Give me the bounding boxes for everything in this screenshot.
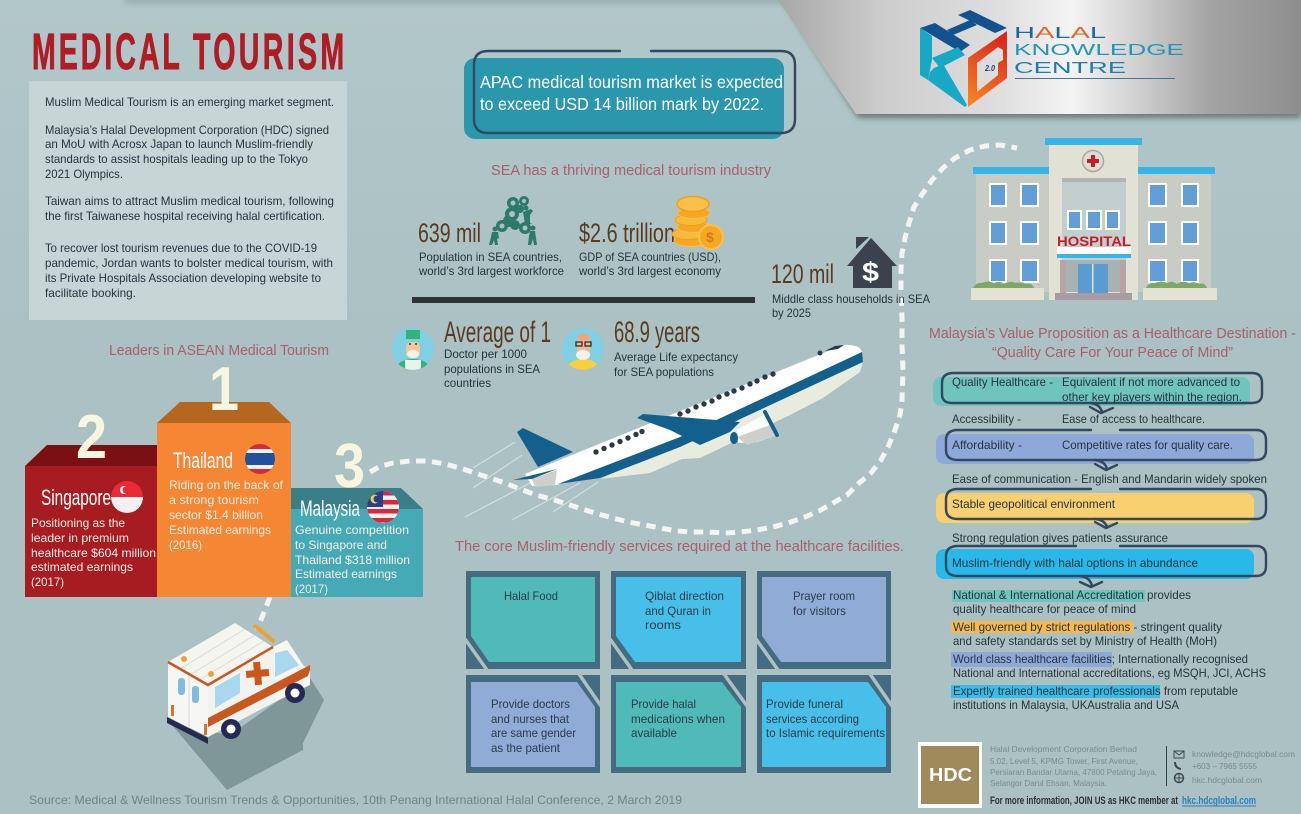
card: halal food (465, 571, 600, 670)
podium: Thailand (157, 355, 291, 597)
list: highlighted facts (951, 588, 1266, 712)
stat: average of 1 doctor: populations in SEA (444, 362, 540, 376)
item: quality healthcare: Quality Healthcare - (952, 375, 1053, 389)
heading: core services: The core Muslim-friendly services required at the healthcare facilities. (455, 539, 904, 555)
card: qiblat: and Quran in (645, 604, 711, 618)
fact: professionals: Expertly trained healthcare professionals from reputable (953, 684, 1238, 698)
footer: address: Halal Development Corporation Berhad (990, 744, 1137, 754)
podium: Malaysia: (2017) (295, 582, 328, 596)
fact: facilities: World class healthcare facilities; Internationally recognised (953, 652, 1248, 666)
card: qiblat: rooms (645, 618, 681, 632)
panel: introduction: Muslim Medical Tourism is an emerging market segment. (45, 95, 334, 109)
item: strong regulation: Strong regulation gives patients assurance (952, 531, 1168, 545)
fact: professionals: institutions in Malaysia, UKAustralia and USA (953, 698, 1179, 712)
fact: facilities: National and International accreditations, eg MSQH, JCI, ACHS (953, 666, 1266, 680)
title: MEDICAL (32, 23, 180, 80)
item: geopolitical: Stable geopolitical environment (952, 497, 1116, 511)
fact: accreditation: quality healthcare for peace of mind (953, 602, 1136, 616)
callout: APAC market (464, 51, 795, 139)
item: quality healthcare (933, 373, 1262, 413)
fact: professionals (951, 684, 1238, 712)
podium: Malaysia: Estimated earnings (295, 567, 397, 581)
stat: life expectancy: 68.9 years (614, 316, 700, 349)
card: halal food: Halal Food (504, 589, 558, 603)
card: doctors and nurses: are same gender (491, 726, 576, 740)
heading: value proposition (929, 326, 1296, 361)
item: affordability: Competitive rates for quality care. (1062, 438, 1233, 452)
podium: Thailand: (2016) (169, 538, 202, 552)
logo wordmark: CENTRE (1014, 60, 1126, 77)
item: muslim-friendly (936, 546, 1266, 587)
divider bar (412, 297, 755, 303)
title (32, 23, 344, 80)
card: halal medications: Provide halal (631, 697, 696, 711)
fact: regulations: Well governed by strict regulations - stringent quality (953, 620, 1222, 634)
podium: Malaysia: 3 (334, 432, 365, 501)
card: funeral services (757, 674, 892, 773)
footer: address (990, 744, 1157, 788)
item: accessibility: Ease of access to healthcare. (1062, 412, 1205, 426)
footer: contacts (1166, 746, 1295, 786)
footer: membership call to action: For more information, JOIN US as HKC member at (990, 795, 1178, 807)
item: affordability: Affordability - (952, 438, 1022, 452)
services grid (465, 571, 892, 773)
podium: Malaysia: Malaysia (300, 496, 361, 521)
panel: introduction: Malaysia’s Halal Development Corporation (HDC) signed (45, 123, 329, 137)
podium: Thailand: a strong tourism (169, 493, 259, 507)
podium: Thailand: Estimated earnings (169, 523, 271, 537)
item: affordability (936, 430, 1266, 470)
icon: elderly man (562, 328, 604, 370)
podium: Thailand: Riding on the back of (169, 478, 284, 492)
illustration: ambulance (167, 623, 324, 790)
logo wordmark (1014, 25, 1184, 79)
stat: $2.6 trillion: world’s 3rd largest economy (578, 264, 721, 278)
podium: Malaysia (291, 432, 423, 597)
footer: address: 5.02, Level 5, KPMG Tower, First Avenue, (990, 756, 1138, 766)
panel: introduction: an MoU with Acrosx Japan to launch Muslim-friendly (45, 137, 313, 151)
illustration: airplane (465, 345, 863, 520)
footer: HDC logo: HDC (929, 765, 972, 785)
card: doctors and nurses (466, 674, 601, 773)
list: value proposition items (933, 373, 1267, 587)
flag: Thailand (245, 444, 275, 474)
stat: life expectancy: Average Life expectancy (614, 350, 738, 364)
podium: Thailand: sector $1.4 billion (169, 508, 263, 522)
stat: average of 1 doctor (444, 316, 551, 390)
icon: doctor (392, 328, 434, 370)
card: halal medications (611, 674, 747, 773)
item: ease of communication: Ease of communication - English and Mandarin widely spoken (952, 472, 1267, 486)
heading: leaders: Leaders in ASEAN Medical Tourism (109, 343, 329, 359)
footer: HDC logo (918, 742, 982, 808)
logo wordmark: KNOWLEDGE (1014, 42, 1184, 59)
podium: Singapore: healthcare $604 million (31, 546, 156, 560)
source note: Source: Medical & Wellness Tourism Trends & Opportunities, 10th Penang International Halal Conference, 2 March 2019 (29, 793, 682, 807)
footer: contacts: knowledge@hdcglobal.com (1192, 749, 1295, 759)
logo cube: 2.0 (984, 64, 995, 73)
stat: 120 mil (771, 259, 930, 320)
card: funeral services: Provide funeral (766, 697, 843, 711)
icon: house with dollar: $ (862, 257, 879, 287)
logo cube (920, 10, 1007, 107)
stat: 639 mil: Population in SEA countries, (419, 250, 562, 264)
stat: average of 1 doctor: countries (444, 376, 491, 390)
stat: $2.6 trillion (578, 218, 721, 278)
stat: average of 1 doctor: Doctor per 1000 (444, 347, 527, 361)
panel: introduction: Taiwan aims to attract Muslim medical tourism, following (45, 194, 334, 208)
podium: Singapore: Positioning as the (31, 516, 125, 530)
panel: introduction: 2021 Olympics. (45, 167, 123, 181)
stat: average of 1 doctor: Average of 1 (444, 316, 551, 349)
footer: address: Selangor Darul Ehsan, Malaysia. (990, 778, 1107, 788)
card: halal medications: available (631, 726, 677, 740)
footer: membership call to action: hkc.hdcglobal.com (1182, 795, 1256, 807)
stat: life expectancy: for SEA populations (614, 365, 714, 379)
callout: APAC market: APAC medical tourism market is expected (480, 72, 783, 92)
route: dashed flight path (370, 145, 1017, 533)
card: funeral services: to Islamic requirements (766, 726, 885, 740)
icon: coins (672, 196, 723, 249)
fact: accreditation: National & International Accreditation provides (953, 588, 1191, 602)
title: TOURISM (193, 23, 344, 80)
panel: introduction: To recover lost tourism revenues due to the COVID-19 (45, 241, 317, 255)
panel: introduction: the first Taiwanese hospital receiving halal certification. (45, 209, 325, 223)
panel: introduction: its Private Hospitals Association developing website to (45, 271, 321, 285)
heading: value proposition: “Quality Care For Your Peace of Mind” (992, 345, 1233, 361)
footer: contacts: +603 – 7965 5555 (1192, 761, 1257, 771)
panel: introduction: facilitate booking. (45, 286, 136, 300)
panel: introduction (29, 81, 347, 320)
card: doctors and nurses: as the patient (491, 741, 561, 755)
card: halal medications: medications when (631, 712, 725, 726)
item: accessibility: Accessibility - (952, 412, 1021, 426)
stat: 639 mil (418, 218, 564, 278)
item: accessibility (952, 412, 1205, 426)
item: geopolitical (936, 489, 1266, 528)
stat: 120 mil: by 2025 (772, 306, 811, 320)
podium: Singapore: 2 (76, 403, 107, 472)
illustration: hospital: HOSPITAL (1057, 233, 1131, 249)
route: dashes to ambulance (257, 597, 270, 630)
flag: Singapore (111, 481, 143, 513)
flag: Malaysia (367, 491, 399, 523)
stat: $2.6 trillion: $2.6 trillion (579, 218, 675, 248)
podium: Thailand: Thailand (173, 448, 233, 473)
header banner with logo (778, 0, 1301, 118)
podium: Malaysia: Thailand $318 million (295, 553, 410, 567)
logo wordmark: H A L A L (1014, 25, 1107, 42)
fact: facilities (951, 652, 1266, 680)
card: qiblat (610, 571, 746, 670)
callout: APAC market: to exceed USD 14 billion mark by 2022. (480, 94, 764, 114)
card: doctors and nurses: and nurses that (491, 712, 570, 726)
podium: Malaysia: to Singapore and (295, 538, 387, 552)
stat: $2.6 trillion: GDP of SEA countries (USD), (579, 250, 721, 264)
card: qiblat: Qiblat direction (645, 589, 724, 603)
podium: Singapore (25, 403, 157, 597)
panel: introduction: pandemic, Jordan wants to bolster medical tourism, with (45, 256, 333, 270)
stat: 120 mil: 120 mil (771, 259, 834, 289)
stat: 120 mil: Middle class households in SEA (772, 292, 930, 306)
footer: address: Persiaran Bandar Utama, 47800 Petaling Jaya, (990, 767, 1157, 777)
card: prayer room: Prayer room (793, 589, 855, 603)
illustration: hospital (971, 138, 1217, 300)
icon: people and gears (489, 196, 537, 245)
panel: introduction: standards to assist hospitals leading up to the Tokyo (45, 152, 308, 166)
item: quality healthcare: Equivalent if not more advanced to (1062, 375, 1240, 389)
item: muslim-friendly: Muslim-friendly with halal options in abundance (952, 556, 1198, 570)
fact: accreditation (952, 588, 1191, 616)
icon: house with dollar (847, 237, 897, 288)
podium: Singapore: Singapore (41, 485, 111, 510)
podium: Singapore: estimated earnings (31, 560, 133, 574)
podium: Thailand: 1 (209, 355, 239, 424)
card: prayer room: for visitors (793, 604, 846, 618)
item: quality healthcare: other key players within the region. (1062, 390, 1242, 404)
card: funeral services: services according (766, 712, 859, 726)
card: prayer room (756, 571, 891, 670)
stat: 639 mil: world’s 3rd largest workforce (418, 264, 564, 278)
footer: contacts: hkc.hdcglobal.com (1192, 775, 1262, 785)
stat: life expectancy (614, 316, 738, 379)
card: doctors and nurses: Provide doctors (491, 697, 570, 711)
fact: regulations (951, 620, 1222, 648)
heading: value proposition: Malaysia’s Value Proposition as a Healthcare Destination - (929, 326, 1296, 342)
fact: regulations: and safety standards set by Ministry of Health (MoH) (953, 634, 1217, 648)
icon: coins: $ (706, 229, 714, 245)
podium: Singapore: leader in premium (31, 531, 129, 545)
podium: Singapore: (2017) (31, 575, 64, 589)
stat: 639 mil: 639 mil (418, 218, 481, 248)
heading: SEA industry: SEA has a thriving medical tourism industry (491, 163, 772, 179)
podium: Malaysia: Genuine competition (295, 523, 409, 537)
